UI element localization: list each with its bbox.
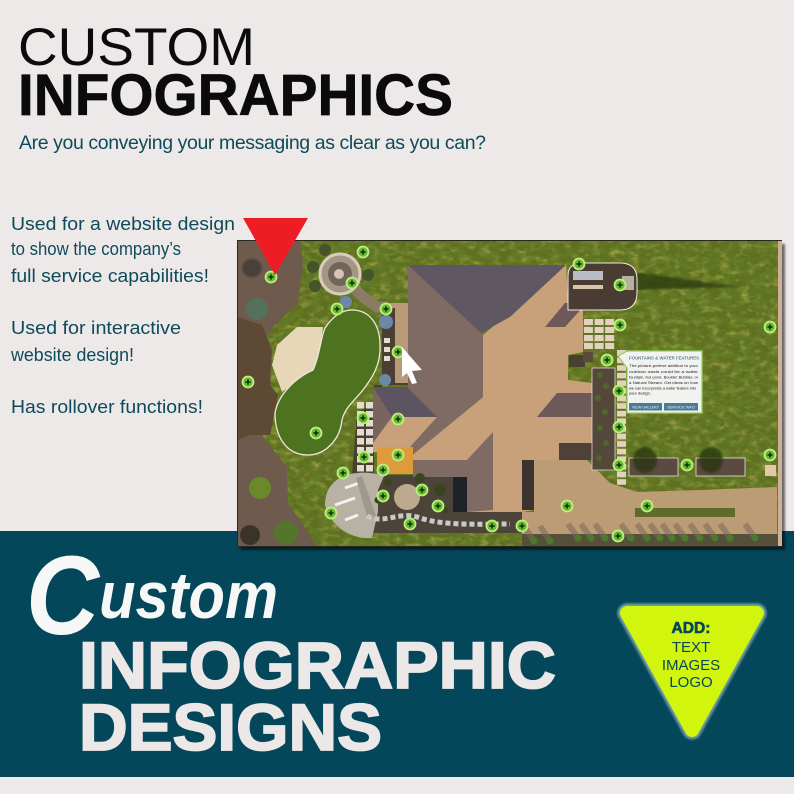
script heading: custom: ustom xyxy=(99,558,278,632)
tooltip popup: your design. xyxy=(629,392,651,396)
tooltip popup: outdoor oasis could be a water xyxy=(629,370,699,374)
house roof tan xyxy=(410,264,592,512)
left trees xyxy=(238,259,298,545)
map shadow and frame xyxy=(237,240,785,550)
icon: red triangle pointer xyxy=(243,218,308,275)
lower wing roofs xyxy=(373,387,493,512)
callout: add text images logo: IMAGES xyxy=(662,657,720,674)
tooltip popup: The picture-perfect addition to your xyxy=(629,364,699,368)
hotspot markers xyxy=(242,246,776,542)
grass texture xyxy=(238,241,778,546)
landscape site plan xyxy=(237,240,785,550)
left garden path xyxy=(238,241,317,546)
rock waterfall and stone path xyxy=(325,473,510,538)
tooltip popup: a Natural Stream. Get ideas on how xyxy=(629,381,698,385)
right roof shadows xyxy=(522,303,592,510)
lower garden bed xyxy=(365,475,522,533)
fire pit patio xyxy=(307,244,388,307)
back patio bed xyxy=(568,263,740,310)
tooltip popup: we can incorporate a water feature into xyxy=(629,386,696,390)
low hedge strip xyxy=(635,508,735,517)
text block: usage notes: full service capabilities! xyxy=(11,265,209,286)
sand trap xyxy=(272,327,323,392)
text block: usage notes: to show the company’s xyxy=(11,238,181,259)
text block: usage notes: Used for interactive xyxy=(11,317,181,338)
walkway beside house xyxy=(340,296,408,475)
callout: add text images logo: TEXT xyxy=(672,639,710,656)
house roof mauve xyxy=(408,265,483,457)
icon: mouse cursor xyxy=(402,347,422,384)
text block: usage notes: Has rollover functions! xyxy=(11,396,203,417)
house roof dark xyxy=(408,265,566,333)
garden beds along house xyxy=(583,352,615,470)
paving stones xyxy=(584,319,626,485)
subtitle: Are you conveying your messaging as clear as you can? xyxy=(19,132,486,154)
heading: infographic designs: DESIGNS xyxy=(79,690,382,764)
text block: usage notes xyxy=(10,213,235,417)
title: custom infographics: CUSTOM xyxy=(18,18,255,77)
callout: add text images logo: LOGO xyxy=(669,674,713,691)
script heading: custom: C xyxy=(26,533,101,658)
driveway xyxy=(522,460,777,546)
tooltip popup: SERVICE INFO xyxy=(667,405,695,409)
tooltip popup: fountain, Koi pond, Boulder Bubbler, or xyxy=(629,376,699,380)
tooltip popup: VIEW GALLERY xyxy=(632,405,659,409)
title: custom infographics xyxy=(18,18,453,128)
text block: usage notes: Used for a website design xyxy=(11,213,235,234)
heading: infographic designs xyxy=(79,628,556,764)
callout: add text images logo xyxy=(627,613,757,730)
planter boxes xyxy=(629,447,776,476)
pergola xyxy=(377,447,413,474)
title: custom infographics: INFOGRAPHICS xyxy=(18,63,453,128)
heading: infographic designs: INFOGRAPHIC xyxy=(79,628,556,702)
putting green xyxy=(275,310,380,455)
callout: add text images logo: ADD: xyxy=(672,620,710,637)
tooltip popup xyxy=(618,351,702,413)
panel: teal footer band xyxy=(0,531,794,777)
text block: usage notes: website design! xyxy=(10,344,134,365)
bottom tree row xyxy=(522,524,778,546)
tooltip popup: FOUNTAINS & WATER FEATURES xyxy=(629,356,699,360)
